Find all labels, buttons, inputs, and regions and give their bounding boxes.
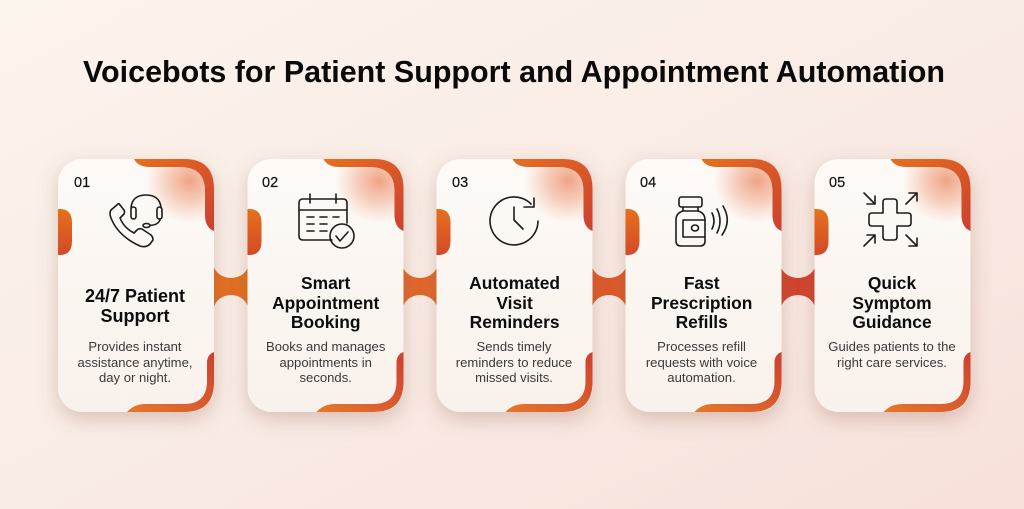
card 3 text: Sends timely [477,339,552,354]
card 1 text: assistance anytime, [78,355,192,370]
card 4 text: automation. [667,370,736,385]
card 3 text: reminders to reduce [456,355,572,370]
card 4 heading: Prescription [651,293,752,313]
card 5 heading: Quick [868,273,916,293]
card 1 heading: Support [100,306,170,326]
icon: medicine bottle with voice waves [676,197,727,246]
card 5 text: right care services. [837,355,947,370]
card 2 number: 02 [262,175,278,191]
card 4 text: requests with voice [646,355,757,370]
card 4 heading: Fast [684,273,720,293]
connector: 1 to 2 [213,262,249,312]
card 1 text: day or night. [99,370,171,385]
card 2 heading: Smart [301,273,351,293]
card 5 number: 05 [829,175,845,191]
card 1 heading: 24/7 Patient [85,286,185,306]
card 2 heading: Booking [291,312,360,332]
icon: phone headset [110,195,162,247]
card 4 text: Processes refill [657,339,746,354]
icon: clock [490,197,538,245]
card 5 heading: Guidance [852,312,932,332]
card 3 text: missed visits. [475,370,553,385]
panel: card 1 [58,139,234,412]
panel: card 4 [626,139,802,412]
card 4 number: 04 [640,175,656,191]
card 3 heading: Visit [496,293,533,313]
card 1 text: Provides instant [88,339,182,354]
panel: card 5 [814,139,990,412]
connector: 3 to 4 [591,262,627,312]
icon: medical cross with arrows [864,193,917,246]
card 2 text: appointments in [279,355,372,370]
card 5 text: Guides patients to the [828,339,956,354]
card 3 number: 03 [452,175,468,191]
connector: 2 to 3 [402,262,438,312]
card 2 text: seconds. [299,370,352,385]
card 4 heading: Refills [676,312,728,332]
card 3 heading: Automated [469,273,560,293]
card 2 text: Books and manages [266,339,386,354]
card 2 heading: Appointment [272,293,380,313]
card 1 number: 01 [74,175,90,191]
card 5 heading: Symptom [852,293,932,313]
title: Voicebots for Patient Support and Appointment Automation [83,55,945,89]
connector: 4 to 5 [780,262,816,312]
panel: card 2 [248,139,424,412]
icon: calendar check [299,194,354,248]
card 3 heading: Reminders [470,312,560,332]
panel: card 3 [436,139,612,412]
